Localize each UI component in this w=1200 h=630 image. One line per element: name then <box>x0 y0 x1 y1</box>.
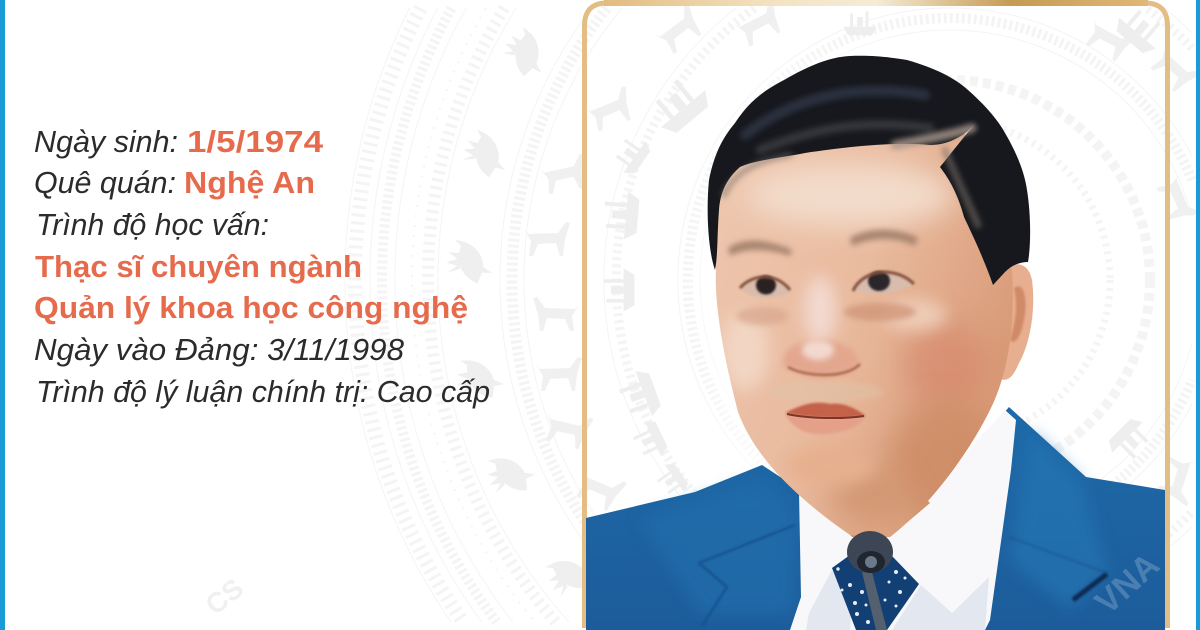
shirt collar shading <box>806 570 989 630</box>
hometown <box>34 165 315 200</box>
bronze drum background pattern <box>345 8 1192 622</box>
education label: Trình độ học vấn: <box>36 207 269 242</box>
ear inner shade <box>1010 286 1026 342</box>
eyebrows <box>728 230 918 256</box>
degree: Thạc sĩ chuyên ngành <box>35 249 362 284</box>
lips <box>785 403 866 434</box>
shirt <box>790 410 1016 630</box>
party admission date: Ngày vào Đảng: 3/11/1998 <box>34 332 405 367</box>
tie <box>832 555 919 630</box>
face <box>715 120 1013 537</box>
degree: Quản lý khoa học công nghệ <box>34 290 468 325</box>
right blue edge strip <box>1196 0 1200 630</box>
gold portrait frame <box>584 3 1168 628</box>
biography text block <box>34 124 490 409</box>
hometown: Quê quán: <box>34 165 176 200</box>
eye right <box>853 271 914 294</box>
nose <box>783 340 860 378</box>
ear <box>998 264 1033 380</box>
soft halo <box>700 50 1040 520</box>
hometown: Nghệ An <box>184 165 315 200</box>
suit <box>586 407 1165 630</box>
birth date <box>34 124 324 159</box>
left blue edge strip <box>0 0 5 630</box>
infographics watermark: CS <box>200 572 249 621</box>
degree <box>34 249 468 325</box>
face shading <box>721 163 1000 525</box>
drum motifs <box>446 0 1200 606</box>
neck <box>850 500 930 537</box>
hair highlights <box>724 91 978 225</box>
hair <box>708 56 1030 285</box>
suit highlights and lapels <box>640 430 1108 626</box>
political theory level: Trình độ lý luận chính trị: Cao cấp <box>36 374 490 409</box>
gold frame top highlight <box>604 0 1148 6</box>
microphone <box>847 531 893 630</box>
eye left <box>740 276 790 298</box>
birth date: Ngày sinh: <box>34 124 178 159</box>
birth date: 1/5/1974 <box>187 124 324 159</box>
VNA watermark: VNA <box>1088 546 1167 622</box>
portrait photo <box>586 50 1167 630</box>
